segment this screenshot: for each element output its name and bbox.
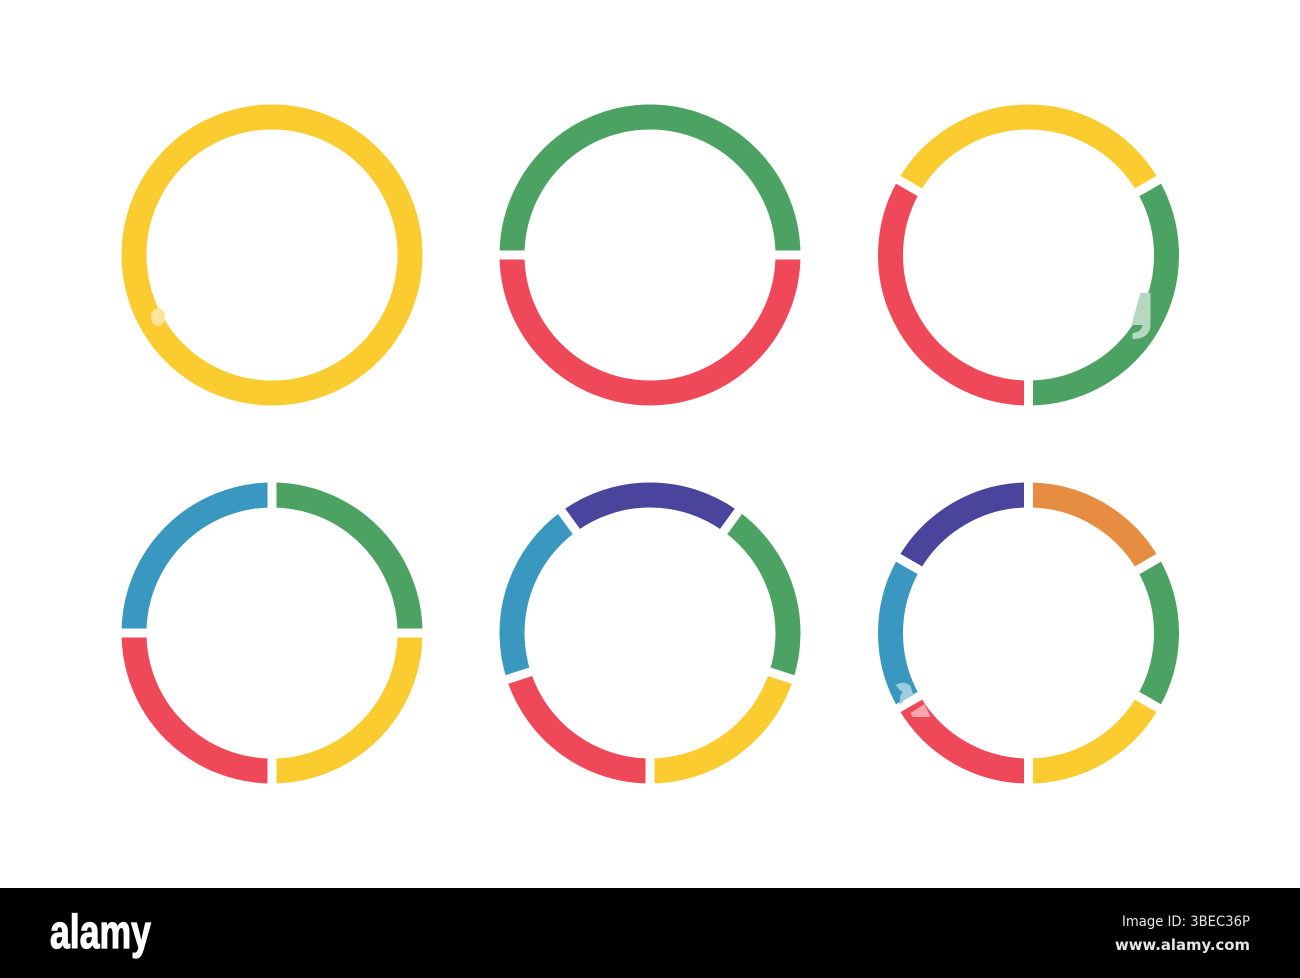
watermark fragment on red segment (910, 704, 930, 717)
ring: four segments (117, 478, 427, 788)
segment: yellow (909, 117, 1148, 186)
segment: green (1148, 564, 1166, 702)
watermark fragment on green segment (1132, 293, 1150, 339)
segment: yellow (650, 676, 781, 771)
segment: purple (909, 495, 1028, 564)
ring: two segments (495, 117, 805, 393)
ring: three segments (891, 117, 1166, 410)
segment: red (519, 676, 650, 771)
segment: green (731, 521, 788, 676)
segment: red (891, 186, 1028, 393)
segment: red (134, 633, 272, 771)
segment: yellow (272, 633, 410, 771)
watermark fragment on yellow ring (151, 308, 165, 326)
segment: purple (569, 495, 731, 521)
website text: www.alamy.com (1115, 936, 1250, 954)
logo: alamy: alamy (50, 905, 151, 958)
segment: yellow (1028, 702, 1148, 771)
segment: green top half (512, 117, 788, 255)
segment: green (1028, 186, 1166, 393)
segment: red (909, 702, 1028, 771)
segment: blue (512, 521, 569, 676)
image id text: Image ID: 3BEC36P (1122, 914, 1250, 930)
segment: green (272, 495, 410, 633)
watermark fragment on blue segment (896, 683, 914, 705)
segment: red bottom half (512, 255, 788, 393)
segment: blue (134, 495, 272, 633)
segment: blue (891, 564, 909, 702)
segment: orange (1028, 495, 1148, 564)
ring: six segments (891, 478, 1166, 788)
footer band (0, 888, 1300, 978)
ring: one solid yellow segment (134, 117, 410, 393)
ring: five segments (503, 495, 797, 788)
